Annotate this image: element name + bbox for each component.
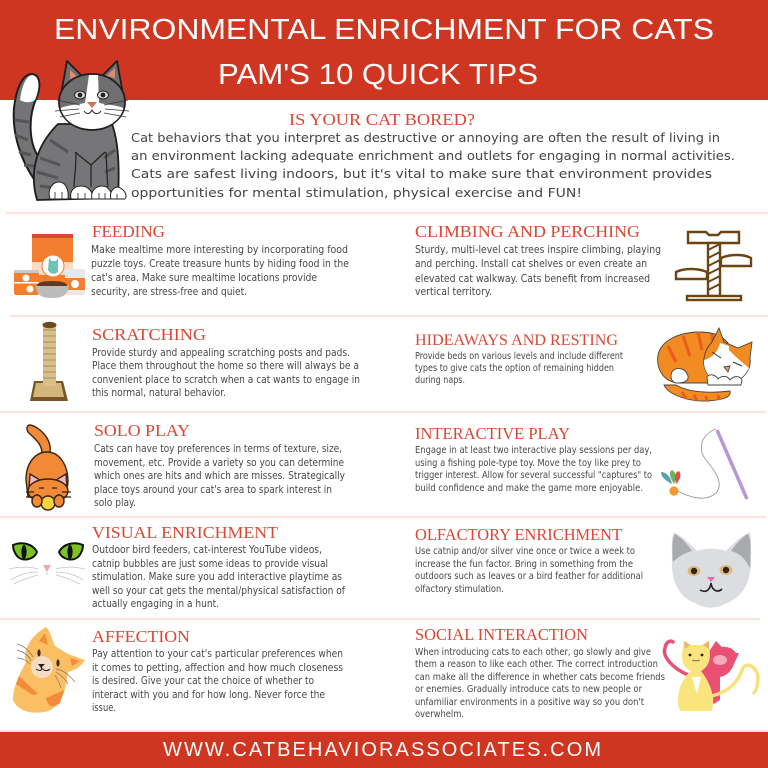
text: hideaways and resting [415, 351, 623, 386]
text: visual enrichment: catnip bubbles are just some ideas to provide visual [92, 558, 328, 570]
text: social interaction: When introducing cats to each other, go slowly and give [415, 647, 651, 658]
text: solo play: which ones are hits and which are misses. Strategically [94, 470, 345, 482]
panel: solo play [26, 421, 345, 510]
text: solo play: place toys around your cat's area to spark interest in [94, 484, 332, 496]
icon: green cat eyes [9, 543, 85, 584]
text: olfactory enrichment: Use catnip and/or silver vine once or twice a week to [415, 546, 635, 557]
text: affection: Pay attention to your cat's particular preferences when [92, 648, 343, 660]
heading: affection: AFFECTION [92, 627, 190, 646]
text: climbing and perching: Sturdy, multi-level cat trees inspire climbing, playing [415, 244, 661, 256]
text: interactive play: using a fishing pole-type toy. Move the toy like prey to [415, 458, 641, 469]
text: affection [92, 648, 343, 714]
heading: climbing and perching: CLIMBING AND PERCHING [415, 222, 640, 241]
text: olfactory enrichment: olfactory stimulation. [415, 584, 504, 595]
heading: scratching: SCRATCHING [92, 325, 206, 344]
text: feeding [91, 244, 349, 298]
text: climbing and perching: elevated cat walkway. Cats benefit from increased [415, 273, 650, 285]
heading: is your cat bored: IS YOUR CAT BORED? [289, 110, 475, 129]
text: affection: it comes to petting, affection and how much closeness [92, 662, 343, 674]
panel: hideaways and resting [415, 328, 752, 401]
text: olfactory enrichment [415, 546, 643, 595]
heading: olfactory enrichment: OLFACTORY ENRICHMENT [415, 525, 623, 544]
text: social interaction: can make all the difference in whether cats become friends [415, 672, 665, 683]
text: feeding: security, are stress-free and quiet. [91, 286, 247, 298]
icon: gray tabby cat [14, 61, 129, 200]
intro paragraph: Cats are safest living indoors, but it's vital to make sure that environment provides [131, 167, 712, 182]
intro paragraph: an environment lacking adequate enrichment and outlets for engaging in normal activities. [131, 149, 735, 164]
title: ENVIRONMENTAL ENRICHMENT FOR CATS [54, 14, 714, 46]
panel: scratching [30, 322, 360, 401]
text: scratching: this normal, natural behavior. [92, 387, 226, 399]
text: feeding: Make mealtime more interesting by incorporating food [91, 244, 348, 256]
text: social interaction: overwhelm. [415, 709, 464, 720]
text: interactive play: build confidence and make the game more enjoyable. [415, 483, 643, 494]
text: affection: is desired. Give your cat the choice of whether to [92, 675, 314, 687]
text: feeding: puzzle toys. Create treasure hunts by hiding food in the [91, 258, 349, 270]
text: hideaways and resting: types to give cats the option of remaining hidden [415, 363, 614, 374]
title: PAM'S 10 QUICK TIPS [218, 59, 538, 91]
text: hideaways and resting: Provide beds on various levels and include different [415, 351, 623, 362]
text: climbing and perching [415, 244, 661, 298]
text: climbing and perching: vertical territory. [415, 286, 492, 298]
icon: fishing pole toy [661, 429, 747, 499]
text: interactive play: trigger interest. Allow for several successful "captures" to [415, 470, 652, 481]
panel: interactive play [415, 424, 747, 499]
icon: scratching post [30, 322, 68, 401]
text: visual enrichment [92, 544, 345, 610]
intro paragraph: opportunities for mental stimulation, physical exercise and FUN! [131, 186, 582, 201]
heading: solo play: SOLO PLAY [94, 421, 190, 440]
text: affection: issue. [92, 702, 116, 714]
text: social interaction: them a reason to like each other. The correct introduction [415, 659, 658, 670]
icon: cat tree [676, 232, 751, 300]
text: interactive play: Engage in at least two interactive play sessions per day, [415, 445, 652, 456]
text: affection: interact with you and for how long. Never force the [92, 689, 325, 701]
text: social interaction: unfamiliar environments in a positive way so you don't [415, 697, 644, 708]
icon: yellow and pink cats [664, 641, 758, 711]
header banner [0, 0, 768, 100]
text: solo play: Cats can have toy preferences in terms of texture, size, [94, 443, 342, 455]
heading: social interaction: SOCIAL INTERACTION [415, 625, 588, 644]
text: olfactory enrichment: outdoors such as leaves or a bird feather for additional [415, 571, 643, 582]
heading: hideaways and resting: HIDEAWAYS AND RESTING [415, 332, 618, 349]
text: solo play [94, 443, 345, 509]
title [54, 14, 714, 91]
text: visual enrichment: actually engaging in a hunt. [92, 598, 219, 610]
text: social interaction: or enemies. Gradually introduce cats to new people or [415, 684, 643, 695]
heading: visual enrichment: VISUAL ENRICHMENT [92, 523, 279, 542]
text: visual enrichment: stimulation. Make sure you add interactive playtime as [92, 571, 342, 583]
panel: olfactory enrichment [415, 525, 751, 608]
intro paragraph: Cat behaviors that you interpret as destructive or annoying are often the result of living in [131, 131, 720, 146]
footer banner [0, 732, 768, 768]
text: interactive play [415, 445, 652, 494]
text: solo play: solo play. [94, 497, 136, 509]
text: scratching: Provide sturdy and appealing scratching posts and pads. [92, 347, 350, 359]
panel: feeding [14, 222, 349, 298]
text: scratching: convenient place to scratch when a cat wants to engage in [92, 374, 360, 386]
text: scratching [92, 347, 360, 399]
panel: affection [13, 627, 343, 714]
heading: interactive play: INTERACTIVE PLAY [415, 424, 570, 443]
icon: orange cat with ball [26, 425, 71, 510]
icon: gray cat face [672, 533, 751, 608]
panel: visual enrichment [9, 523, 345, 610]
text: feeding: cat's area. Make sure mealtime locations provide [91, 272, 317, 284]
text: social interaction [415, 647, 665, 720]
text: scratching: Place them throughout the home so there will always be a [92, 360, 359, 372]
text: visual enrichment: well so your cat gets the mental/physical satisfaction of [92, 585, 345, 597]
panel: climbing and perching [415, 222, 751, 300]
icon: cat food bag and cans [14, 234, 85, 298]
text: climbing and perching: and perching. Install cat shelves or even create an [415, 258, 647, 270]
icon: sleeping orange cat [658, 328, 752, 401]
panel: social interaction [415, 625, 758, 720]
intro paragraph [131, 131, 735, 201]
section: is your cat bored [131, 110, 735, 201]
text: visual enrichment: Outdoor bird feeders, cat-interest YouTube videos, [92, 544, 322, 556]
footer url: WWW.CATBEHAVIORASSOCIATES.COM [163, 739, 601, 761]
icon: smiling orange cat [13, 627, 85, 713]
heading: feeding: FEEDING [92, 222, 165, 241]
text: solo play: movement, etc. Provide a variety so you can determine [94, 457, 344, 469]
text: hideaways and resting: during naps. [415, 375, 465, 386]
text: olfactory enrichment: increase the fun factor. Bring in something from the [415, 559, 633, 570]
